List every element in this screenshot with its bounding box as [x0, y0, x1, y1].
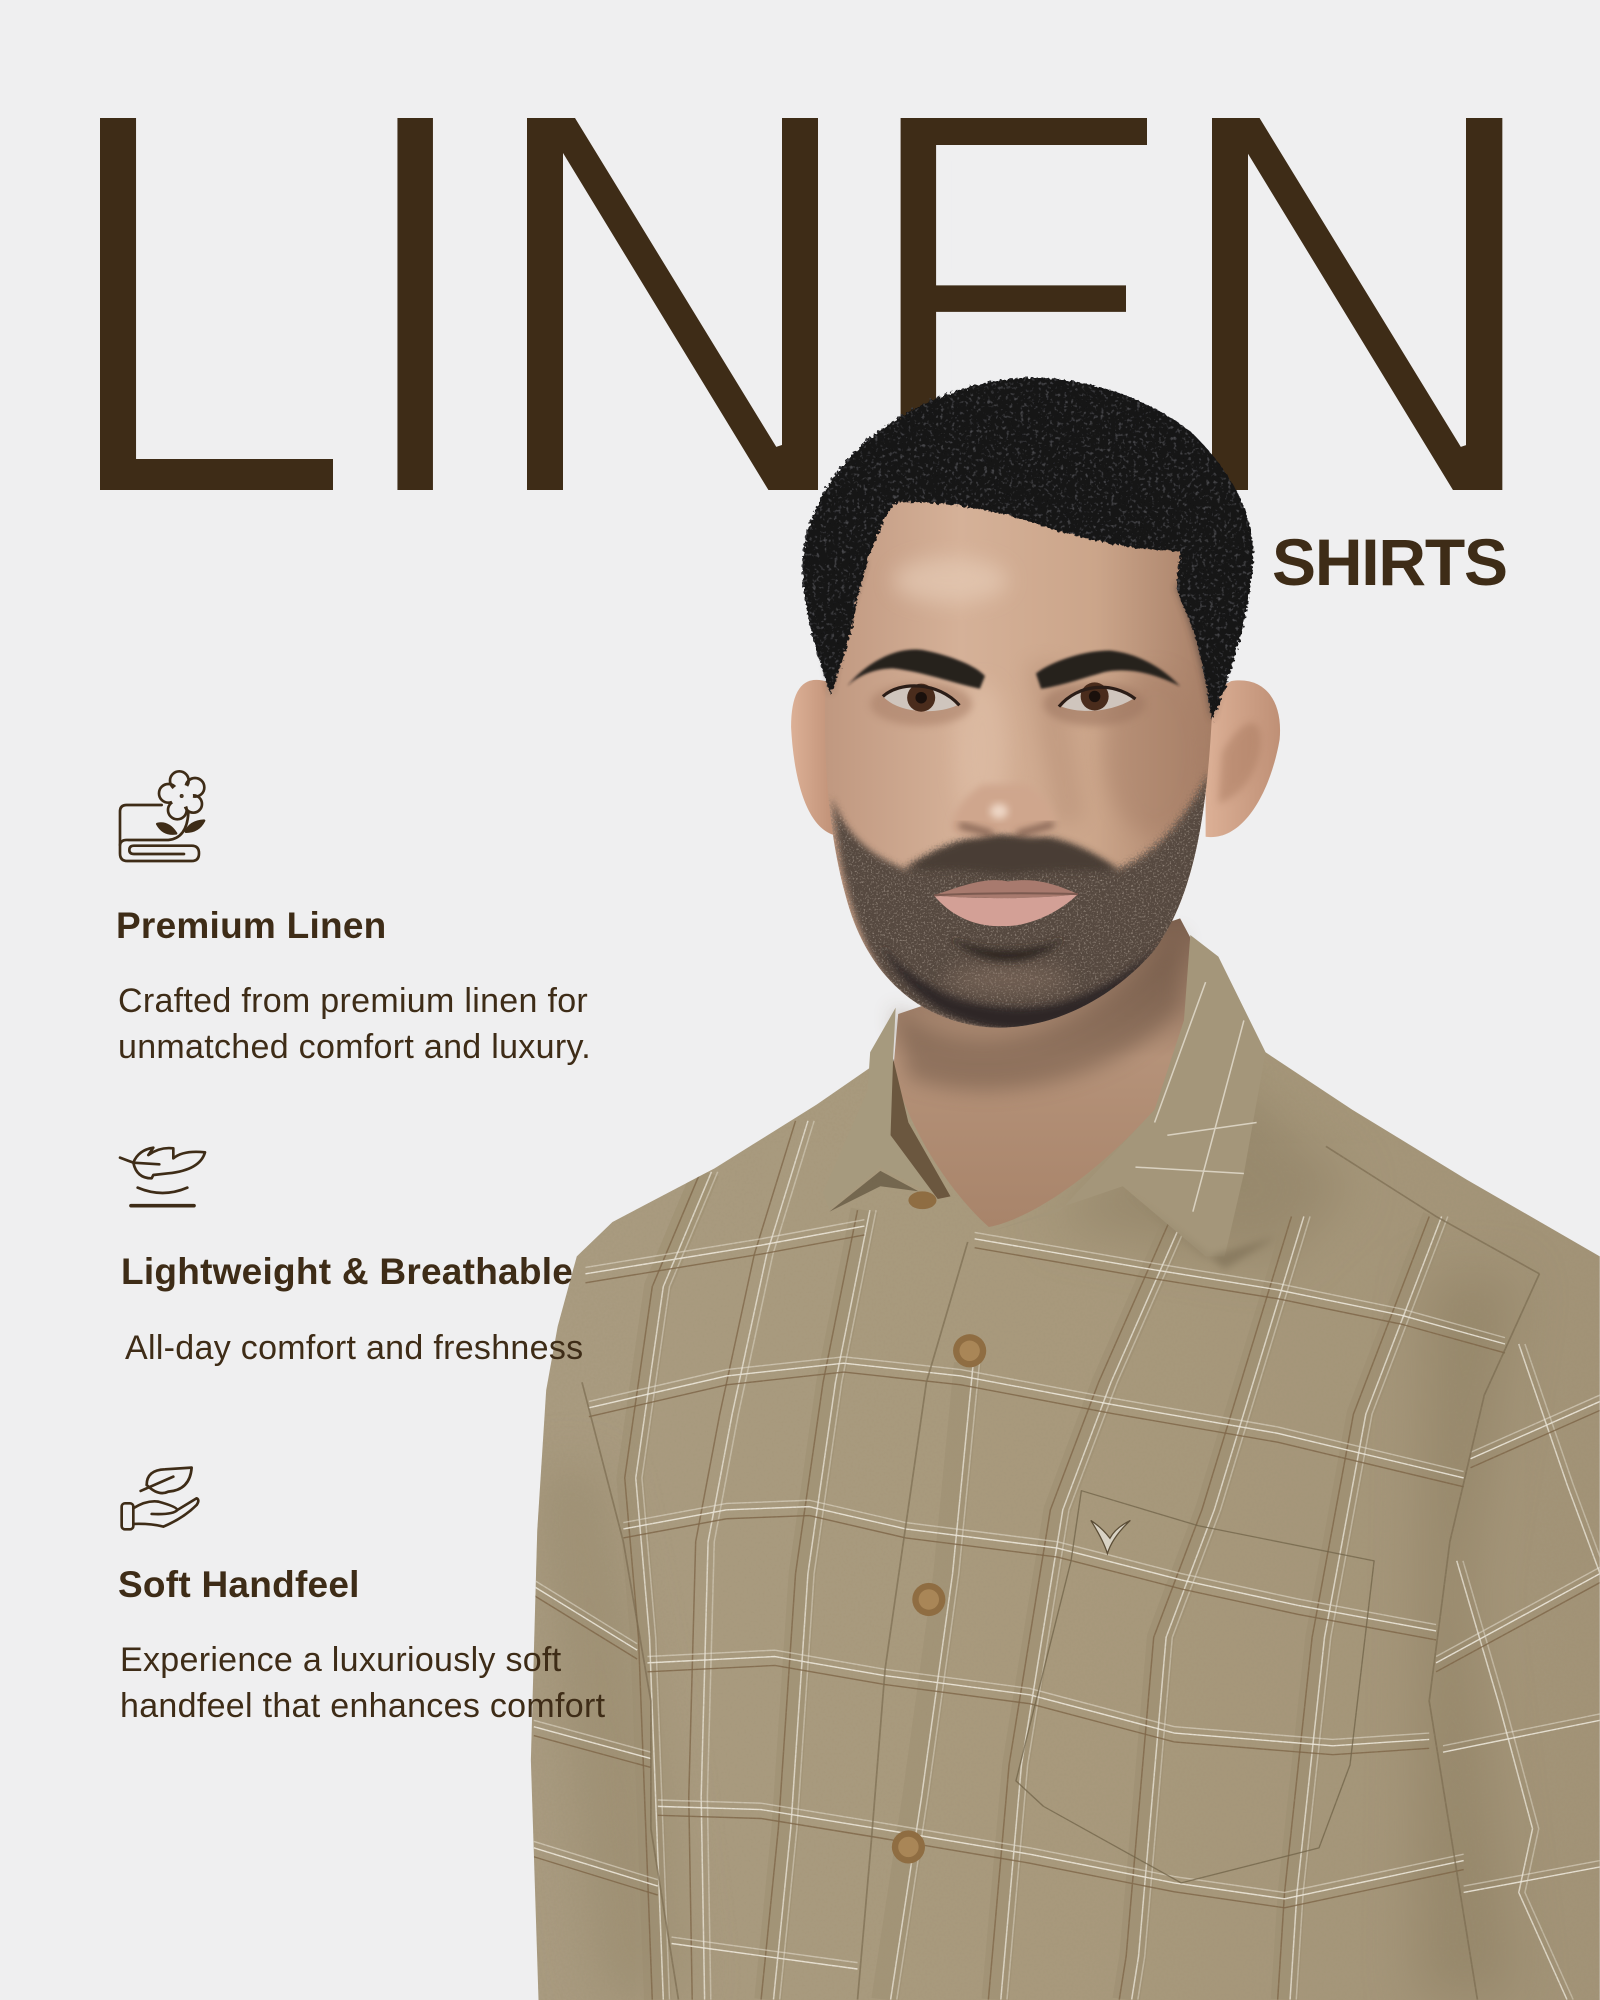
text: All-day comfort: All-day comfort and freshness	[125, 1329, 583, 1367]
text: Experience	[120, 1641, 605, 1725]
horizontal lines	[534, 1226, 1600, 1969]
text: Crafted from premium linen	[118, 982, 591, 1066]
heading: Premium Linen: Premium Linen	[116, 905, 387, 946]
plaid bands	[534, 1121, 1600, 2000]
icon: hand with leaf	[120, 1466, 200, 1531]
title: LINEN: LINEN	[48, 0, 1555, 618]
pocket	[1016, 1491, 1374, 1883]
icon: feather	[118, 1146, 206, 1208]
subtitle: SHIRTS: SHIRTS	[1272, 525, 1507, 599]
icon: towel and flower	[118, 770, 206, 862]
shirt	[523, 1046, 1600, 2000]
hair	[803, 377, 1253, 721]
beard	[832, 772, 1209, 1028]
ears	[791, 680, 1280, 837]
vertical lines	[636, 1121, 1600, 2000]
heading: Lightweight and Breathable: Lightweight & Breathable	[121, 1251, 573, 1292]
face	[823, 497, 1231, 1031]
neck	[893, 918, 1190, 1227]
panel: Premium Linen	[116, 770, 591, 1066]
text: Experience: handfeel that enhances comfort	[120, 1687, 605, 1725]
garment seams	[582, 1146, 1539, 2000]
fabric shading	[536, 1071, 1518, 2000]
lips	[934, 880, 1078, 926]
collar	[823, 935, 1276, 1269]
left eye	[883, 684, 959, 712]
buttons	[892, 1191, 986, 1864]
text: Crafted from premium linen: Crafted from premium linen for	[118, 982, 588, 1020]
panel: Lightweight and Breathable	[118, 1146, 583, 1367]
forehead highlight	[893, 557, 1008, 603]
eyebrows	[847, 650, 1180, 689]
shirt logo	[1091, 1520, 1130, 1554]
moustache	[903, 835, 1120, 875]
neck stubble shadow	[893, 931, 1180, 1090]
panel: Soft Handfeel	[118, 1466, 605, 1725]
photo: man in linen shirt	[530, 376, 1600, 2000]
nose	[951, 784, 1056, 837]
temple fade	[823, 561, 1231, 721]
eye sockets	[870, 682, 972, 726]
heading: Soft Handfeel: Soft Handfeel	[118, 1564, 360, 1605]
right eye	[1059, 682, 1135, 711]
text: Experience: Experience a luxuriously soft	[120, 1641, 561, 1679]
text: Crafted from premium linen: unmatched comfort and luxury.	[118, 1028, 591, 1066]
weave texture	[523, 1046, 1600, 2000]
